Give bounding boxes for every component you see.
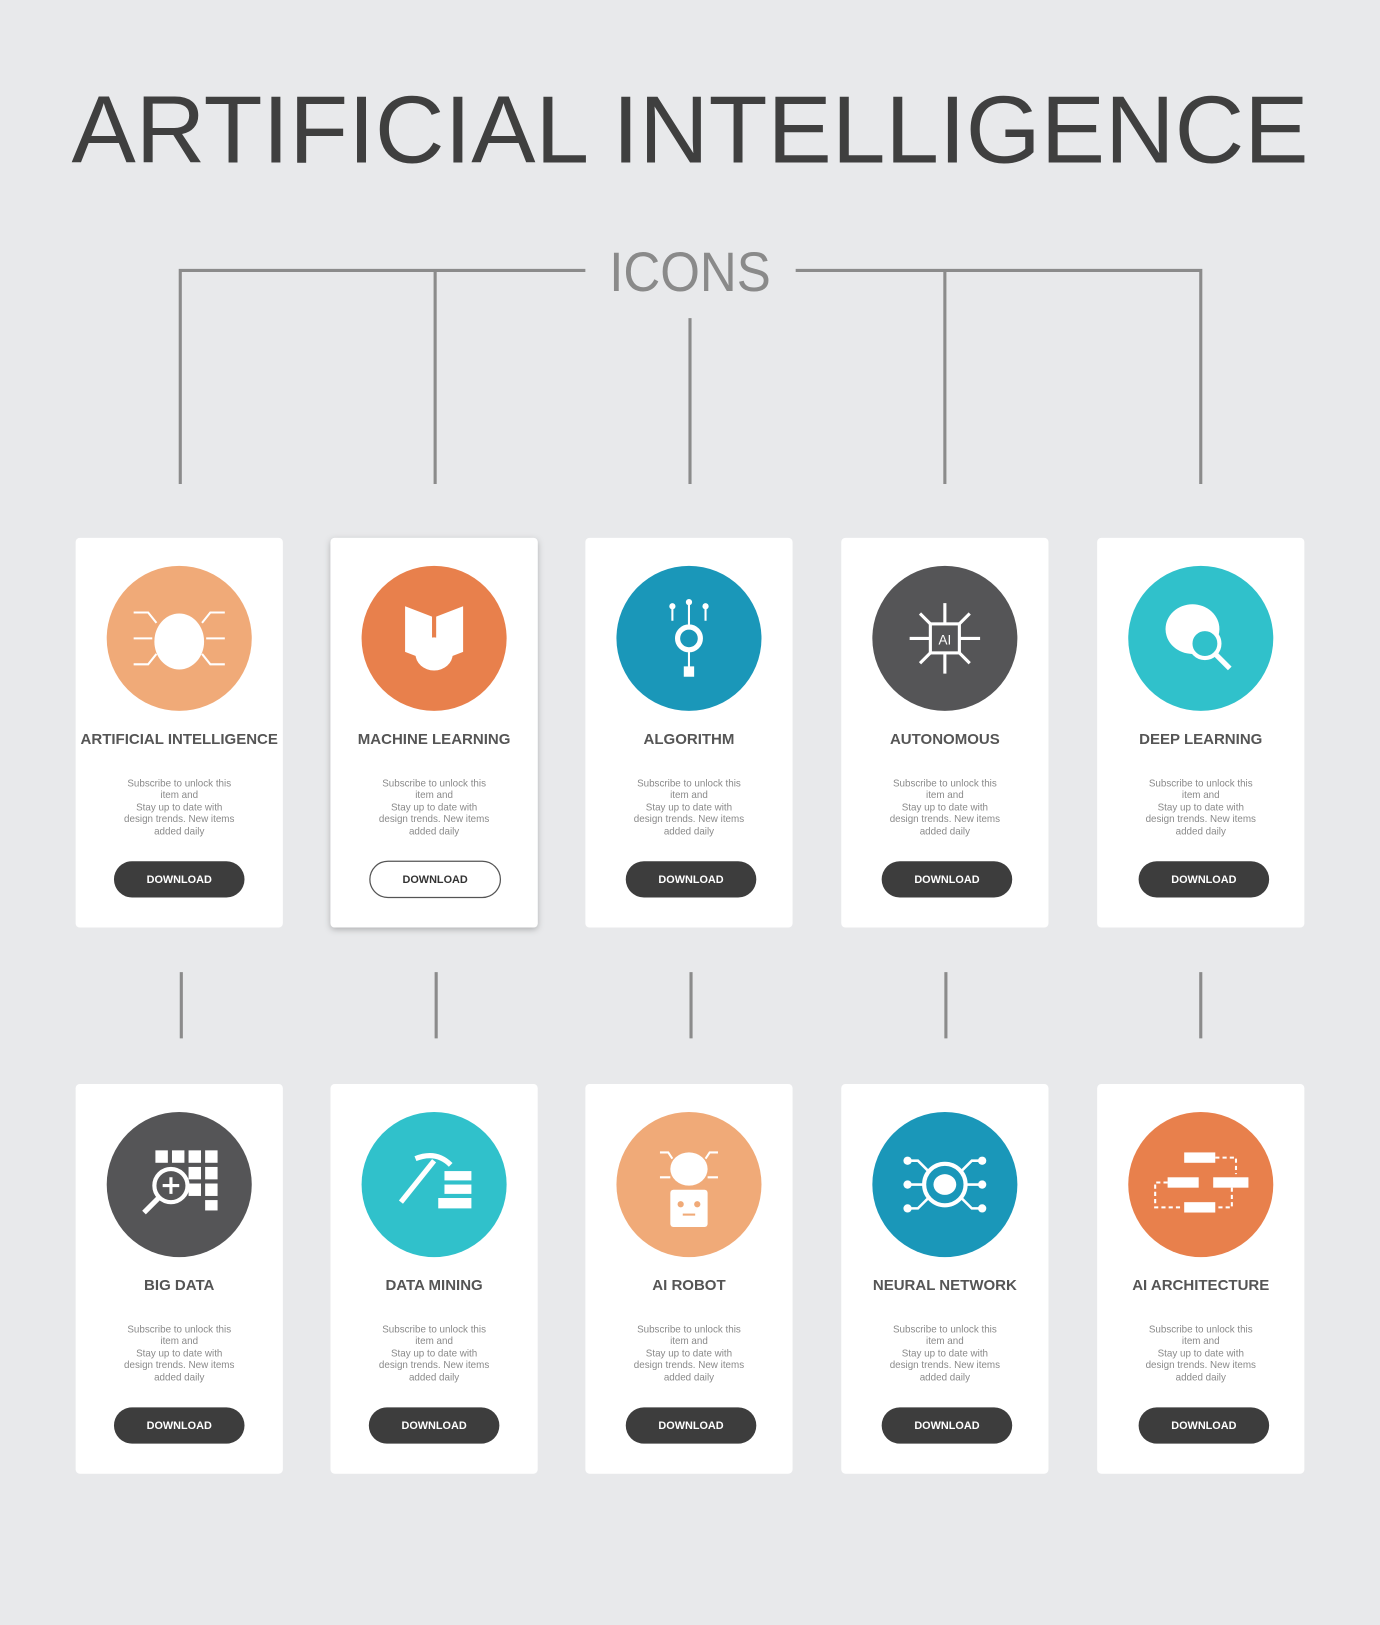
card: big data: Subscribe to unlock this — [127, 1325, 231, 1336]
card: machine learning — [330, 538, 538, 928]
button: DOWNLOAD — [914, 1420, 980, 1432]
card: big data: design trends. New items — [124, 1360, 234, 1371]
card: ai architecture: added daily — [1176, 1372, 1226, 1383]
button — [114, 861, 245, 897]
button — [882, 861, 1012, 897]
button — [114, 1407, 245, 1444]
button — [369, 1407, 499, 1444]
button: DOWNLOAD — [1171, 874, 1237, 886]
card: ai robot — [585, 1084, 793, 1474]
icon: AI chip arrows: AI — [938, 633, 951, 648]
button: DOWNLOAD — [147, 1420, 212, 1432]
card: data mining: item and — [415, 1336, 453, 1347]
card: artificial intelligence: ARTIFICIAL INTELLIGENCE — [81, 731, 278, 748]
icon: grid magnifier — [107, 1112, 252, 1257]
card: autonomous — [841, 538, 1048, 928]
card: neural network: item and — [926, 1336, 964, 1347]
button — [882, 1407, 1012, 1444]
card: data mining: design trends. New items — [379, 1360, 489, 1371]
card: deep learning: Stay up to date with — [1158, 802, 1244, 813]
card: ai architecture — [1097, 1084, 1304, 1474]
card: data mining: Subscribe to unlock this — [382, 1325, 486, 1336]
icon: brain circuit — [107, 566, 252, 711]
card: ai robot: added daily — [664, 1372, 714, 1383]
icon: brain magnifier — [1128, 566, 1273, 711]
card: data mining: DATA MINING — [385, 1277, 483, 1294]
card: big data: Stay up to date with — [136, 1349, 222, 1360]
card: machine learning: design trends. New items — [379, 814, 489, 825]
card: ai architecture: AI ARCHITECTURE — [1132, 1277, 1269, 1294]
card: ai robot: item and — [670, 1336, 708, 1347]
card: algorithm: ALGORITHM — [644, 731, 734, 748]
icon: algorithm gear — [616, 566, 761, 711]
card: machine learning: Subscribe to unlock this — [382, 779, 486, 790]
card: big data: item and — [160, 1336, 198, 1347]
card: artificial intelligence: design trends. New items — [124, 814, 234, 825]
card: ai architecture: design trends. New items — [1146, 1360, 1256, 1371]
card: neural network — [841, 1084, 1048, 1474]
card: deep learning: design trends. New items — [1146, 814, 1256, 825]
button — [1139, 1407, 1269, 1444]
card: big data — [76, 1084, 283, 1474]
card: ai robot: AI ROBOT — [652, 1277, 726, 1294]
button outlined: DOWNLOAD — [403, 874, 468, 886]
card: machine learning: MACHINE LEARNING — [358, 731, 510, 748]
card: machine learning: Stay up to date with — [391, 802, 477, 813]
card: algorithm: Subscribe to unlock this — [637, 779, 741, 790]
card: deep learning — [1097, 538, 1304, 928]
card: neural network: NEURAL NETWORK — [873, 1277, 1017, 1294]
button: DOWNLOAD — [658, 874, 724, 886]
icon: robot brain — [616, 1112, 761, 1257]
card: neural network: design trends. New items — [890, 1360, 1000, 1371]
icon: book brain — [362, 566, 507, 711]
button — [626, 1407, 756, 1444]
card: autonomous: AUTONOMOUS — [890, 731, 1000, 748]
card: data mining — [330, 1084, 538, 1474]
card: deep learning: Subscribe to unlock this — [1149, 779, 1253, 790]
button: DOWNLOAD — [1171, 1420, 1237, 1432]
card: algorithm: item and — [670, 790, 708, 801]
card: autonomous: added daily — [920, 826, 970, 837]
card: autonomous: Subscribe to unlock this — [893, 779, 997, 790]
icon: AI chip arrows — [872, 566, 1017, 711]
card: artificial intelligence — [76, 538, 283, 928]
icon: flowchart — [1128, 1112, 1273, 1257]
subtitle: icons: ICONS — [609, 240, 771, 303]
card: algorithm: design trends. New items — [634, 814, 744, 825]
card: algorithm: Stay up to date with — [646, 802, 732, 813]
card: autonomous: Stay up to date with — [902, 802, 988, 813]
card: ai robot: Subscribe to unlock this — [637, 1325, 741, 1336]
button — [626, 861, 756, 897]
card: algorithm — [585, 538, 793, 928]
card: algorithm: added daily — [664, 826, 714, 837]
card: artificial intelligence: Stay up to date with — [136, 802, 222, 813]
button — [1139, 861, 1269, 897]
card: ai architecture: item and — [1182, 1336, 1220, 1347]
card: ai robot: Stay up to date with — [646, 1349, 732, 1360]
card: artificial intelligence: item and — [160, 790, 198, 801]
card: data mining: Stay up to date with — [391, 1349, 477, 1360]
button outlined — [370, 861, 500, 897]
card: artificial intelligence: Subscribe to unlock this — [127, 779, 231, 790]
card: big data: BIG DATA — [144, 1277, 215, 1294]
card: deep learning: added daily — [1176, 826, 1226, 837]
card: data mining: added daily — [409, 1372, 459, 1383]
card: artificial intelligence: added daily — [154, 826, 204, 837]
button: DOWNLOAD — [658, 1420, 724, 1432]
card: deep learning: DEEP LEARNING — [1139, 731, 1262, 748]
card: neural network: Subscribe to unlock this — [893, 1325, 997, 1336]
card: ai robot: design trends. New items — [634, 1360, 744, 1371]
card: neural network: Stay up to date with — [902, 1349, 988, 1360]
card: machine learning: item and — [415, 790, 453, 801]
icon: pickaxe data — [362, 1112, 507, 1257]
card: neural network: added daily — [920, 1372, 970, 1383]
icon: neural network — [872, 1112, 1017, 1257]
button: DOWNLOAD — [914, 874, 980, 886]
connector tree — [180, 270, 1201, 1038]
button: DOWNLOAD — [147, 874, 212, 886]
card: autonomous: item and — [926, 790, 964, 801]
card: big data: added daily — [154, 1372, 204, 1383]
title: ARTIFICIAL INTELLIGENCE — [71, 78, 1309, 184]
card: ai architecture: Subscribe to unlock this — [1149, 1325, 1253, 1336]
card: ai architecture: Stay up to date with — [1158, 1349, 1244, 1360]
card: deep learning: item and — [1182, 790, 1220, 801]
card: autonomous: design trends. New items — [890, 814, 1000, 825]
card: machine learning: added daily — [409, 826, 459, 837]
button: DOWNLOAD — [401, 1420, 467, 1432]
